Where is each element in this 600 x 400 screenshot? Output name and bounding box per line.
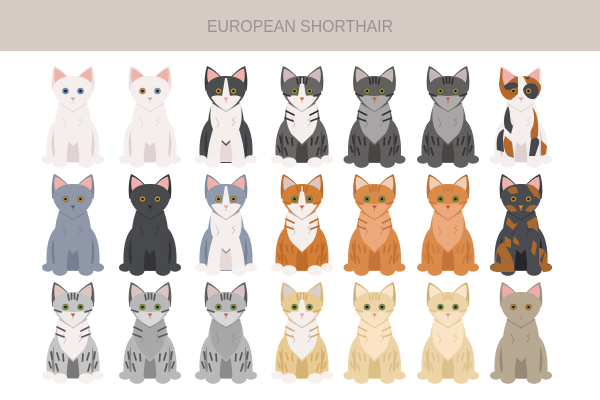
cat: red plain peach chest [417, 174, 479, 276]
cat: solid taupe [490, 282, 552, 384]
cat: red tabby peach chest [344, 174, 406, 276]
cat: white odd-eye blue [42, 66, 104, 168]
cat: silver tabby grey chest [119, 282, 181, 384]
cat: black and white [195, 66, 257, 168]
cat: tortoiseshell [490, 174, 552, 276]
cat: white odd-eye amber [119, 66, 181, 168]
cat: red tabby with white [271, 174, 333, 276]
cat: silver tabby with white [42, 282, 104, 384]
cat: dark tabby plain chest [417, 66, 479, 168]
cat: silver tabby plain chest [195, 282, 257, 384]
cat: solid blue [42, 174, 104, 276]
header band [0, 0, 600, 51]
cat: grey tabby with white [271, 66, 333, 168]
cat grid [42, 66, 552, 384]
cat: cream plain pale chest [417, 282, 479, 384]
cat: cream tabby with white [271, 282, 333, 384]
title: EUROPEAN SHORTHAIR [207, 16, 393, 36]
cat: solid black [119, 174, 181, 276]
cat: blue and white [195, 174, 257, 276]
cat: calico [490, 66, 552, 168]
cat: cream tabby pale chest [344, 282, 406, 384]
cat: dark tabby grey chest [344, 66, 406, 168]
